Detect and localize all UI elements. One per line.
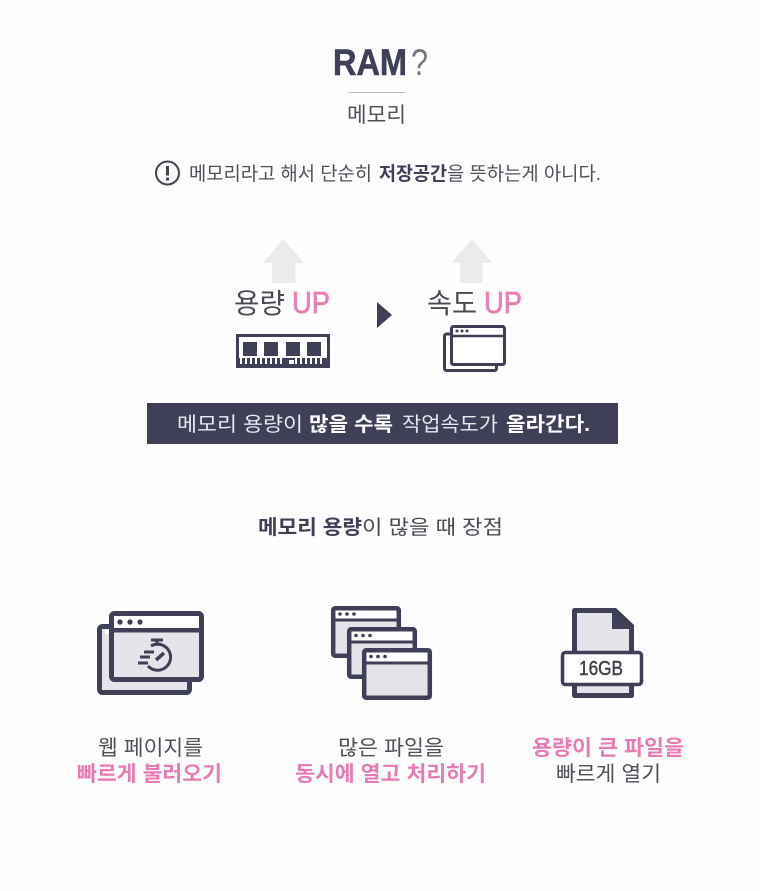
- text: web page loading: [77, 737, 222, 786]
- icon: browser windows: [444, 326, 504, 370]
- text: web page loading: 웹 페이지를: [98, 737, 203, 760]
- label: speed up: 속도: [427, 288, 477, 319]
- banner text: 작업속도가: [402, 413, 498, 436]
- icon: exclamation: [156, 162, 179, 184]
- title: RAM?: RAM: [333, 42, 407, 83]
- section heading: 메모리 용량: [258, 516, 362, 539]
- text: many files: 많은 파일을: [338, 737, 444, 760]
- text: large files: 용량이 큰 파일을: [532, 737, 684, 760]
- panel: large files quickly: [532, 608, 684, 786]
- label: capacity up: UP: [292, 285, 330, 320]
- banner text: 메모리 용량이: [177, 413, 303, 436]
- banner text: [177, 413, 590, 436]
- arrow: capacity up: [263, 239, 304, 283]
- label: capacity up: 용량: [234, 288, 285, 319]
- subtitle: 메모리: [347, 104, 406, 127]
- banner text: 많을 수록: [309, 413, 393, 436]
- icon: stacked windows: [333, 608, 430, 698]
- label: speed up: [427, 285, 522, 320]
- text: many files: [295, 737, 486, 786]
- icon: 16GB file: [562, 608, 642, 696]
- notice text: 을 뜻하는게 아니다.: [447, 163, 601, 185]
- notice text: 메모리라고 해서 단순히: [189, 163, 372, 185]
- notice line: [156, 162, 601, 185]
- arrow: speed up: [451, 239, 492, 283]
- panel: many files at once: [295, 608, 486, 786]
- label: capacity up: [234, 285, 330, 320]
- section heading: 이 많을 때 장점: [362, 516, 503, 539]
- section heading: [258, 516, 503, 539]
- panel: fast web page loading: [77, 614, 222, 786]
- title block: [333, 42, 428, 127]
- icon: memory module: [236, 334, 330, 368]
- banner: [147, 403, 618, 444]
- icon: browser with stopwatch: [100, 614, 202, 692]
- diagram: capacity up to speed up: [234, 239, 522, 370]
- label: 16GB: 16GB: [579, 658, 623, 680]
- banner text: 올라간다.: [506, 413, 590, 436]
- text: large files: [532, 737, 684, 786]
- notice text: 저장공간: [379, 163, 447, 185]
- label: speed up: UP: [484, 285, 522, 320]
- text: many files: 동시에 열고 처리하기: [295, 763, 486, 786]
- arrow: right triangle: [377, 302, 392, 328]
- text: web page loading: 빠르게 불러오기: [77, 763, 222, 786]
- text: large files: 빠르게 열기: [556, 763, 661, 786]
- title: RAM?: ?: [411, 42, 428, 83]
- notice text: [189, 163, 601, 185]
